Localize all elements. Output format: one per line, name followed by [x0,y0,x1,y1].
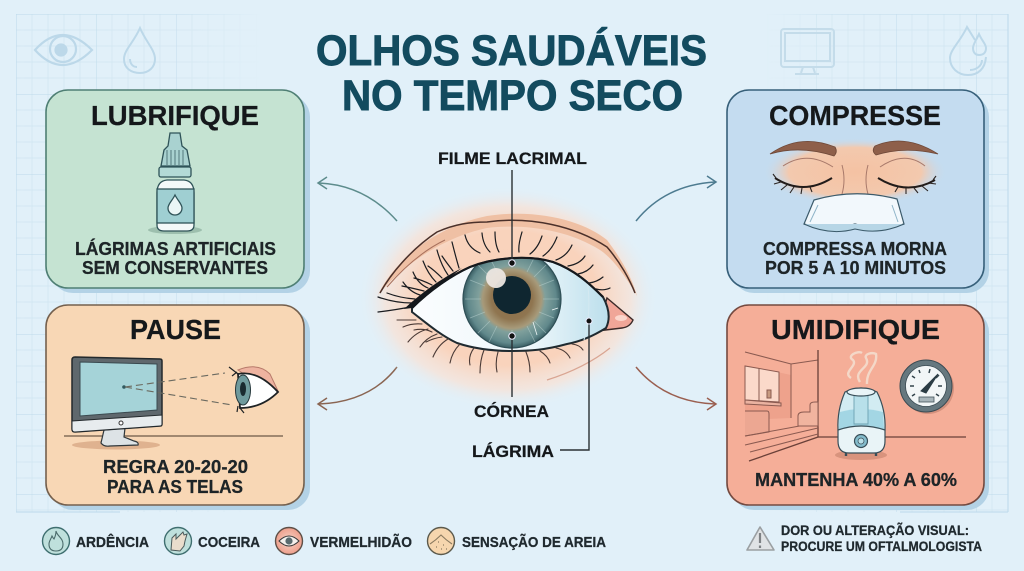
icon: closed eyes with warm compress [763,138,947,232]
icon: eye drop bottle [148,133,202,234]
lower lashes [397,320,583,373]
heading: pause: PAUSE [130,314,221,345]
text: lubrifique caption [75,238,276,278]
legend: ardência [42,528,149,554]
upper lash line [412,258,603,308]
arrow: to lubrifique [318,177,397,221]
warning text: DOR OU ALTERAÇÃO VISUAL: [781,523,969,538]
arrow: to pause [318,367,397,410]
text: umidifique caption: MANTENHA 40% A 60% [755,470,957,490]
callout: córnea: CÓRNEA [474,402,549,421]
legend: sensação de areia [428,528,606,554]
heading: compresse: COMPRESSE [769,100,941,131]
warning icon [747,527,774,550]
icon: monitor [64,357,283,450]
title: NO TEMPO SECO [342,72,683,120]
title: OLHOS SAUDÁVEIS [316,27,707,75]
title [316,27,707,120]
icon: room sketch [745,350,966,461]
arrow: to umidifique [636,367,716,410]
callout: lágrima [472,318,592,461]
panel: umidifique [727,305,989,510]
text: pause caption: REGRA 20-20-20 [103,457,248,477]
caruncle [597,298,633,331]
callout: córnea [474,333,549,421]
sclera [412,258,609,351]
text: pause caption: PARA AS TELAS [107,477,243,497]
tear film arc [584,280,589,340]
legend: ardência: ARDÊNCIA [76,533,149,551]
text: lubrifique caption: LÁGRIMAS ARTIFICIAIS [75,238,276,259]
legend: sensação de areia: SENSAÇÃO DE AREIA [462,533,606,551]
panel: compresse [727,90,989,293]
callout: lágrima: LÁGRIMA [472,442,554,461]
callout: filme lacrimal [438,150,587,266]
heading: lubrifique: LUBRIFIQUE [91,100,259,131]
eye illustration [373,197,643,398]
legend: coceira: COCEIRA [198,534,260,551]
skin glow [358,186,658,410]
icon: humidifier [835,352,887,460]
icon: hygrometer gauge [900,360,954,414]
heading: umidifique: UMIDIFIQUE [771,314,940,345]
icon: background eye [35,35,92,65]
warning text: PROCURE UM OFTALMOLOGISTA [781,539,982,554]
legend: vermelhidão: VERMELHIDÃO [310,533,412,551]
upper lashes [378,232,610,312]
iris [463,250,561,348]
callout: filme lacrimal: FILME LACRIMAL [438,150,587,168]
icon: side eye [229,367,278,413]
text: compresse caption: COMPRESSA MORNA [763,239,947,259]
panel: pause [46,305,310,510]
panel: lubrifique [46,90,310,293]
warning text [781,523,982,554]
text: lubrifique caption: SEM CONSERVANTES [82,258,268,278]
text: compresse caption [763,239,947,278]
dashed sight lines [125,373,232,405]
icon: background droplets [950,27,986,75]
icon: background monitor [781,29,834,74]
text: pause caption [103,457,248,497]
text: compresse caption: POR 5 A 10 MINUTOS [765,258,946,278]
legend: vermelhidão [276,528,412,554]
icon: background drop [124,28,155,73]
legend: coceira [164,528,260,554]
arrow: to compresse [636,176,716,221]
eyelid band [378,214,637,296]
